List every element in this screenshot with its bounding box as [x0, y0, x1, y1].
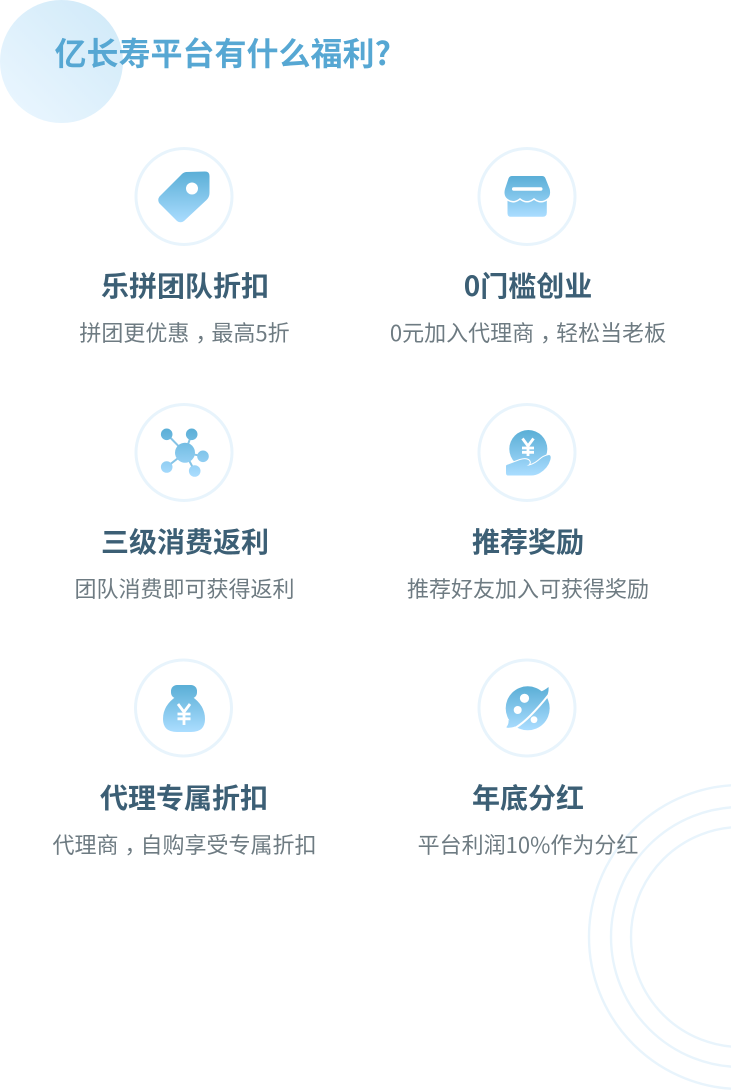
panel: 代理专属折扣 [52, 658, 317, 860]
icon: planet [478, 658, 576, 758]
heading: 0门槛创业 [464, 265, 592, 305]
panel: 0门槛创业 [390, 147, 666, 348]
title: 亿长寿平台有什么福利? [54, 28, 391, 74]
icon: hand holding coin [478, 403, 576, 502]
heading: 年底分红 [472, 777, 584, 817]
heading: 乐拼团队折扣 [101, 265, 269, 305]
icon: money bag [134, 658, 233, 758]
description: 0元加入代理商 ，轻松当老板 [390, 316, 666, 348]
decorative gradient circle behind title [0, 0, 123, 123]
icon: storefront [478, 147, 576, 246]
decorative concentric rings [588, 784, 731, 1090]
heading: 代理专属折扣 [100, 777, 268, 817]
panel: 乐拼团队折扣 [79, 147, 290, 348]
heading: 三级消费返利 [101, 521, 269, 561]
description: 平台利润10%作为分红 [418, 828, 638, 860]
description: 拼团更优惠 ，最高5折 [79, 316, 290, 348]
icon: price tag [134, 147, 234, 246]
panel: 年底分红 [418, 658, 638, 860]
description: 团队消费即可获得返利 [74, 572, 294, 604]
description: 代理商 ，自购享受专属折扣 [52, 828, 317, 860]
heading: 推荐奖励 [472, 521, 584, 561]
icon: network nodes [134, 403, 234, 502]
description: 推荐好友加入可获得奖励 [407, 572, 649, 604]
panel: 三级消费返利 [74, 403, 294, 604]
panel: 推荐奖励 [407, 403, 649, 604]
